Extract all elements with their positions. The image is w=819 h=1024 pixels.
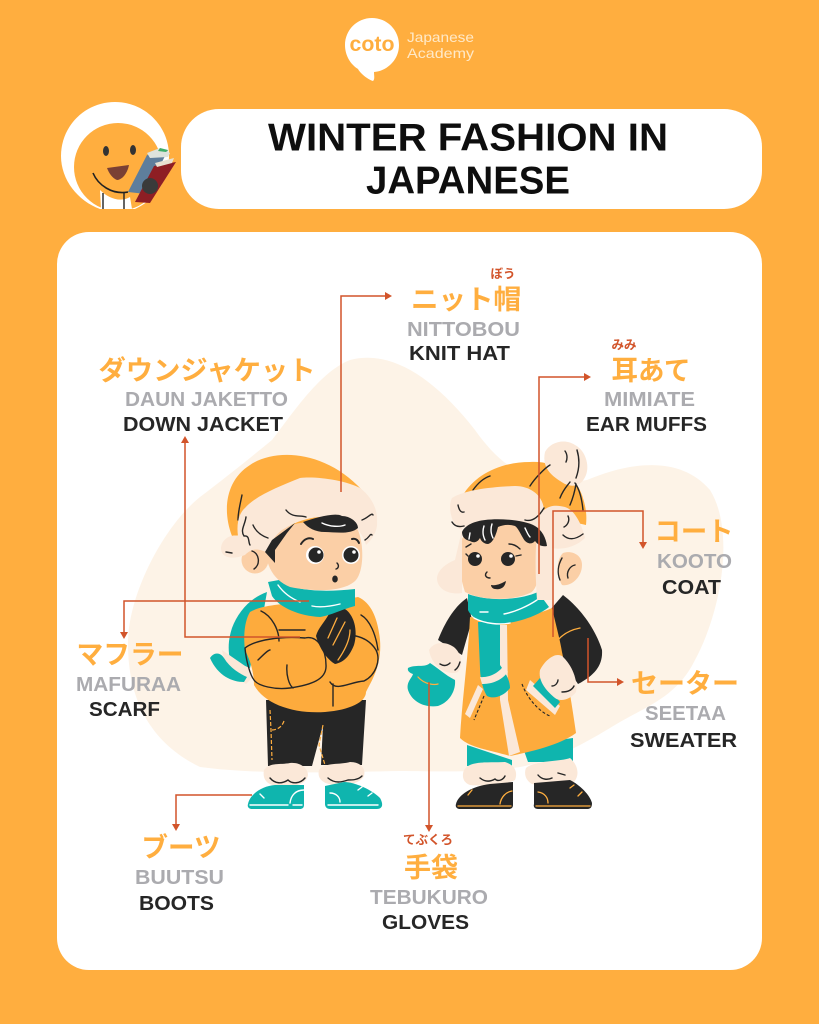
title pill	[181, 109, 762, 209]
label: gloves	[370, 833, 488, 934]
boy boot fur	[264, 763, 308, 786]
label: scarf	[76, 640, 184, 721]
girl hat	[463, 462, 586, 525]
label: knit hat	[407, 267, 521, 365]
girl right pocket	[526, 680, 560, 715]
girl scarf	[468, 592, 549, 624]
label: knit hat: KNIT HAT	[409, 343, 510, 365]
title pill: WINTER FASHION IN	[268, 116, 668, 160]
label: ear muffs: みみ	[611, 338, 637, 352]
label: ear muffs: 耳あて	[612, 356, 690, 386]
girl fur boots	[463, 762, 516, 785]
label: sweater	[630, 669, 739, 752]
label: gloves: GLOVES	[382, 912, 469, 934]
label: sweater: セーター	[631, 669, 739, 699]
title pill: JAPANESE	[366, 160, 570, 202]
arrow: sweater	[588, 638, 624, 686]
girl hair	[462, 519, 547, 546]
label: scarf: マフラー	[76, 640, 184, 670]
character: boy	[210, 455, 382, 809]
logo	[345, 18, 474, 81]
girl arms	[438, 598, 472, 655]
girl pants	[467, 738, 573, 766]
boy hands	[316, 608, 356, 664]
label: boots: BOOTS	[139, 893, 214, 915]
arrow: down jacket	[181, 436, 300, 637]
label: down jacket	[98, 355, 316, 436]
icon: mascot with books	[61, 102, 176, 211]
girl pompom	[544, 441, 587, 486]
logo: Academy	[407, 45, 474, 61]
logo: coto	[350, 33, 394, 56]
label: gloves: 手袋	[404, 853, 458, 883]
girl fur	[437, 486, 585, 600]
label: scarf: MAFURAA	[76, 674, 181, 696]
girl cuffs	[429, 643, 461, 673]
boy pants	[266, 700, 366, 766]
label: sweater: SEETAA	[645, 703, 726, 725]
boy boots	[248, 785, 304, 809]
panel: main white card	[57, 232, 762, 970]
girl scarf tail	[478, 622, 510, 697]
girl eyes and mouth	[466, 544, 521, 589]
arrow: coat	[553, 511, 647, 637]
label: coat: コート	[654, 517, 734, 547]
label: coat: KOOTO	[657, 551, 732, 573]
label: coat	[654, 517, 734, 599]
girl ear	[558, 552, 582, 585]
girl left pocket	[465, 685, 483, 718]
girl coat	[460, 608, 576, 756]
boy left sleeve	[229, 592, 267, 668]
boy scarf	[268, 580, 355, 617]
girl glove	[408, 663, 455, 706]
label: sweater: SWEATER	[630, 730, 738, 752]
label: boots	[135, 832, 224, 915]
label: ear muffs: EAR MUFFS	[586, 414, 707, 436]
label: down jacket: DAUN JAKETTO	[125, 389, 288, 411]
label: scarf: SCARF	[89, 699, 160, 721]
boy ear	[242, 546, 268, 574]
boy fur hat band	[221, 477, 377, 558]
logo: Japanese	[407, 29, 474, 45]
label: ear muffs: MIMIATE	[604, 389, 695, 411]
arrow: scarf	[120, 601, 309, 639]
boy hair	[303, 515, 358, 533]
arrow: gloves	[425, 682, 433, 832]
boy eyes and mouth	[301, 538, 360, 582]
label: boots: ブーツ	[142, 832, 220, 863]
label: down jacket: ダウンジャケット	[98, 355, 316, 386]
boy face	[266, 521, 362, 590]
girl face	[459, 524, 542, 599]
label: boots: BUUTSU	[135, 867, 224, 889]
label: ear muffs	[586, 338, 707, 436]
label: knit hat: ニット帽	[411, 285, 521, 315]
label: gloves: TEBUKURO	[370, 887, 488, 909]
boy jacket	[244, 597, 380, 712]
label: knit hat: ぼう	[490, 267, 516, 281]
arrow: knit hat	[341, 292, 392, 492]
label: gloves: てぶくろ	[403, 833, 453, 847]
arrow: ear muffs	[539, 373, 591, 574]
background blob	[128, 358, 723, 772]
label: knit hat: NITTOBOU	[407, 319, 520, 341]
label: down jacket: DOWN JACKET	[123, 414, 283, 436]
arrow: boots	[172, 795, 252, 831]
girl shoes	[456, 782, 513, 809]
label: coat: COAT	[662, 577, 721, 599]
boy hat	[227, 455, 362, 536]
character: girl	[408, 441, 602, 809]
